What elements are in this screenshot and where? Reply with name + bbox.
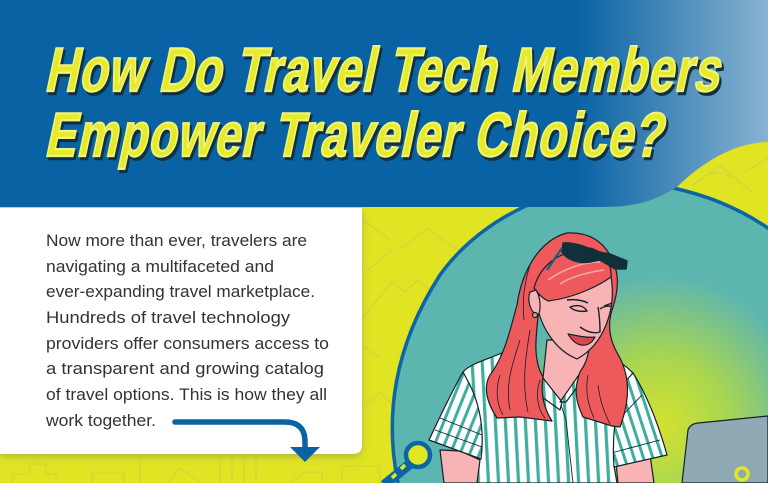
intro text: Now more than ever, travelers are [46, 231, 307, 250]
teal circle panel [392, 183, 768, 483]
intro text: Hundreds of travel technology [46, 308, 291, 327]
title [41, 35, 732, 172]
intro text: ever-expanding travel marketplace. [46, 282, 315, 301]
fringe [534, 248, 611, 301]
collar [535, 356, 596, 410]
title lettering [41, 35, 730, 169]
sleeve folds and placket [435, 395, 660, 483]
left sleeve [429, 372, 482, 459]
sunglasses arm [547, 248, 562, 270]
title lettering: How Do Travel Tech Members [41, 35, 730, 104]
map pin connector [384, 443, 430, 483]
arms [440, 450, 654, 483]
intro text: providers offer consumers access to [46, 334, 329, 353]
intro text: a transparent and growing catalog [46, 359, 324, 378]
intro panel [0, 208, 362, 454]
hair back [486, 233, 628, 427]
intro text: of travel options. This is how they all [46, 385, 327, 404]
sunglasses [562, 243, 627, 269]
title shadow [43, 38, 732, 172]
title lettering: Empower Traveler Choice? [41, 100, 673, 169]
laptop [682, 416, 768, 483]
ear [529, 290, 540, 316]
hair strands [497, 265, 610, 424]
right sleeve [613, 373, 667, 467]
face [536, 276, 612, 359]
neck and chest [543, 340, 593, 402]
laptop pin logo [736, 468, 748, 480]
eyes and brows [567, 300, 612, 333]
hair highlights [548, 262, 604, 284]
shirt [436, 353, 640, 483]
woman illustration [429, 233, 667, 483]
header banner [0, 0, 768, 207]
earring [532, 312, 538, 318]
mountain line pattern [12, 158, 768, 483]
intro text [45, 231, 329, 430]
mouth [568, 334, 595, 345]
title shadow: Empower Traveler Choice? [43, 103, 675, 172]
title shadow: How Do Travel Tech Members [43, 38, 732, 107]
arrow [175, 422, 320, 462]
intro text: navigating a multifaceted and [46, 257, 274, 276]
intro text: work together. [45, 411, 156, 430]
